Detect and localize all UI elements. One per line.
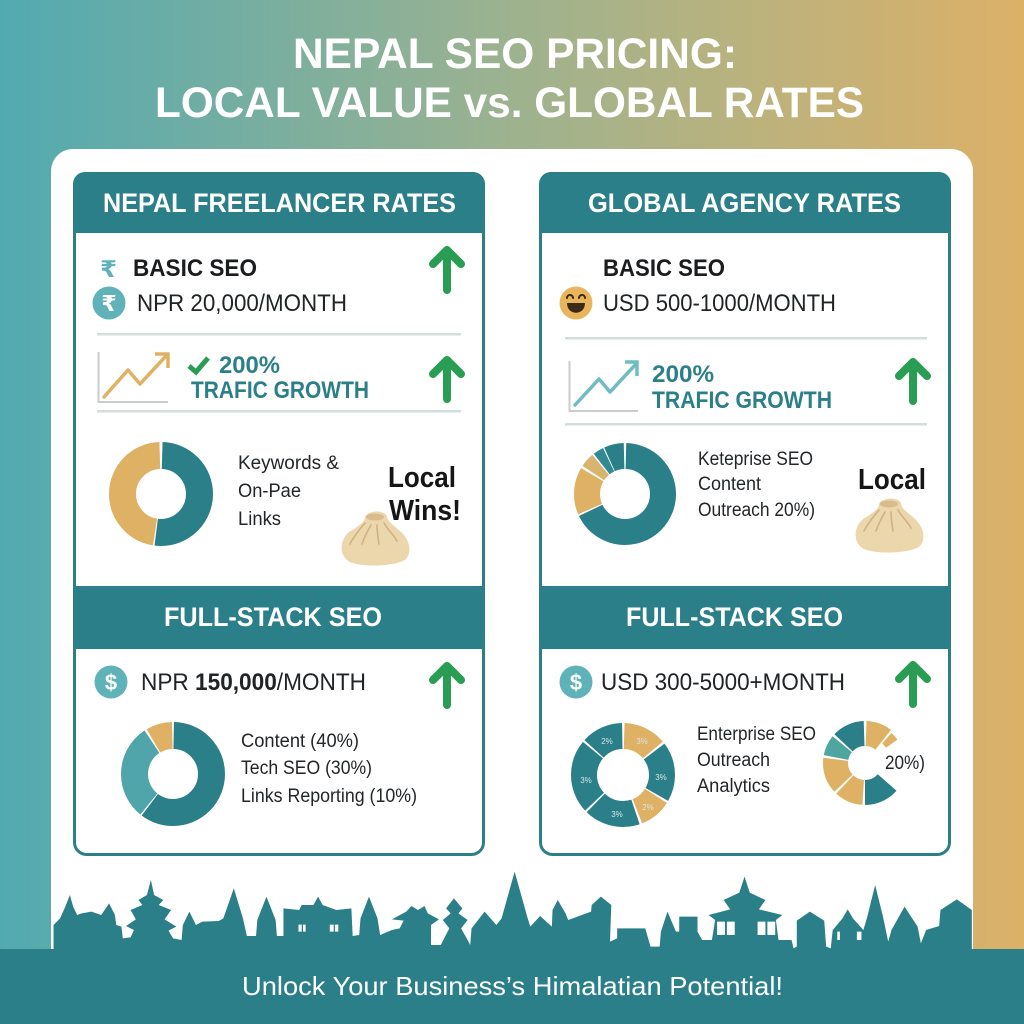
legend: basic SEO [238, 453, 339, 530]
icon: growth chart gold [98, 352, 168, 402]
callout: local wins [388, 462, 461, 527]
donut chart: agency full-stack with segment labels: 3% [636, 737, 648, 746]
legend: full-stack: Content (40%) [241, 731, 359, 752]
title [155, 30, 864, 127]
legend: full-stack [241, 731, 417, 807]
callout: local wins: Wins! [389, 495, 461, 527]
stat: 200% traffic growth: TRAFIC GROWTH [191, 377, 369, 404]
stat: 200% traffic growth [191, 352, 369, 404]
panel: Nepal freelancer rates [73, 172, 485, 854]
footer band [0, 949, 1024, 1024]
legend: agency full-stack [697, 724, 816, 797]
arrow: up [899, 665, 927, 704]
legend: agency basic: Keteprise SEO [698, 449, 813, 470]
icon: momo dumpling [342, 512, 409, 566]
legend: agency full-stack: Enterprise SEO [697, 724, 816, 745]
donut chart: agency full-stack with segment labels: 3% [580, 776, 592, 785]
icon: dollar badge [560, 666, 592, 698]
legend: basic SEO: Links [238, 509, 281, 530]
heading: basic SEO: BASIC SEO [603, 255, 725, 282]
donut chart: partial segments [832, 730, 898, 796]
donut label: 20%: 20%) [885, 753, 925, 774]
icon: rupee badge [92, 286, 126, 320]
price: USD 500-1000: USD 500-1000/MONTH [603, 290, 836, 317]
arrow: up [899, 362, 927, 401]
section band: full-stack SEO: FULL-STACK SEO [164, 602, 382, 632]
panel header: Nepal freelancer rates [73, 172, 485, 233]
title: LOCAL VALUE vs. GLOBAL RATES [155, 79, 864, 127]
stat: 200% traffic growth [652, 361, 832, 414]
callout: local: Local [858, 464, 926, 496]
stat: 200% traffic growth: TRAFIC GROWTH [652, 387, 832, 414]
arrow: up [433, 360, 461, 399]
price: NPR 150,000: NPR 150,000/MONTH [141, 669, 366, 696]
icon: momo dumpling [856, 499, 923, 553]
icon: smiley [560, 286, 592, 320]
heading: basic SEO: BASIC SEO [133, 255, 257, 282]
legend: full-stack: Links Reporting (10%) [241, 786, 417, 807]
donut chart: basic SEO split [122, 456, 200, 532]
panel: global agency rates [539, 172, 951, 854]
stat: 200% traffic growth: 200% [652, 361, 714, 388]
panel header: global agency rates: GLOBAL AGENCY RATES [588, 188, 901, 218]
panel header: Nepal freelancer rates: NEPAL FREELANCER RATES [103, 188, 456, 218]
legend: agency basic [698, 449, 815, 521]
donut chart: full-stack split [134, 736, 212, 812]
panel header: global agency rates [539, 172, 951, 233]
section band: full-stack SEO: FULL-STACK SEO [626, 602, 843, 632]
legend: agency basic: Outreach 20%) [698, 500, 815, 521]
legend: full-stack: Tech SEO (30%) [241, 758, 372, 779]
donut chart: agency full-stack with segment labels: 2% [601, 737, 613, 746]
icon: growth chart teal [570, 361, 638, 411]
donut chart: agency basic split [587, 456, 663, 532]
donut chart: agency full-stack with segment labels [580, 736, 667, 819]
donut chart: agency full-stack with segment labels: 3% [655, 773, 667, 782]
title: NEPAL SEO PRICING: [293, 30, 737, 78]
icon: dollar badge: $ [570, 670, 582, 695]
section band: full-stack SEO [73, 586, 485, 649]
skyline silhouette [54, 872, 972, 953]
footer tagline: Unlock Your Business’s Himalatian Potential! [242, 971, 783, 1001]
donut chart: agency full-stack with segment labels: 3% [611, 810, 623, 819]
legend: agency basic: Content [698, 474, 762, 495]
icon: check mark [189, 358, 208, 372]
arrow: up [433, 250, 461, 290]
section band: full-stack SEO [539, 586, 951, 649]
legend: basic SEO: Keywords & [238, 453, 339, 474]
arrow: up [433, 666, 461, 705]
white card [51, 149, 973, 979]
legend: agency full-stack: Outreach [697, 750, 770, 771]
price: NPR 20,000: NPR 20,000/MONTH [137, 290, 347, 317]
callout: local wins: Local [388, 462, 456, 494]
icon: rupee glyph: ₹ [100, 257, 117, 283]
icon: dollar badge [94, 666, 128, 698]
icon: dollar badge: $ [105, 670, 117, 695]
legend: basic SEO: On-Pae [238, 481, 301, 502]
stat: 200% traffic growth: 200% [219, 352, 280, 379]
donut chart: agency full-stack with segment labels: 2% [642, 803, 654, 812]
price: USD 300-5000: USD 300-5000+MONTH [601, 669, 845, 696]
legend: agency full-stack: Analytics [697, 776, 770, 797]
icon: rupee badge: ₹ [101, 292, 117, 317]
